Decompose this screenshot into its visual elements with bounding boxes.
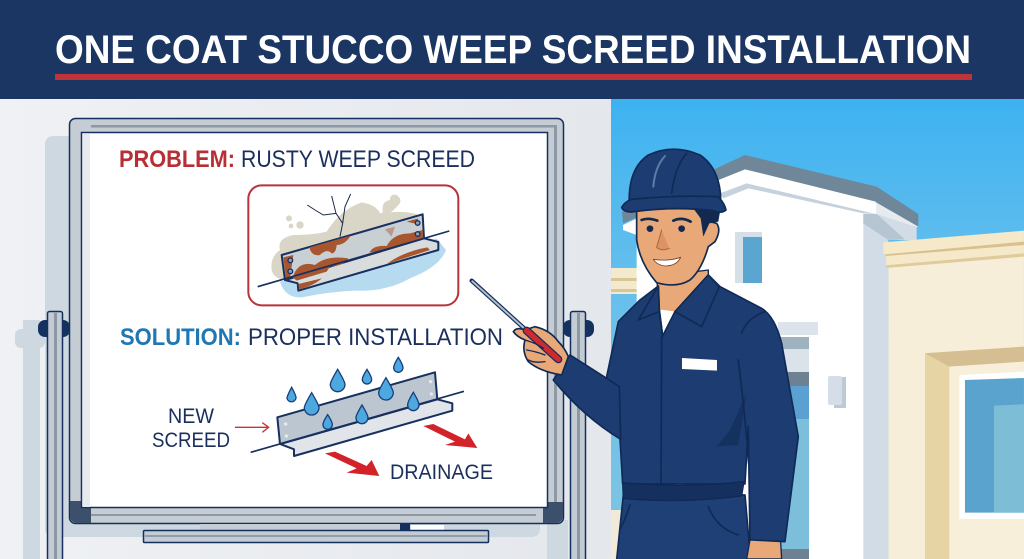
wall line xyxy=(258,231,449,287)
sky xyxy=(611,99,1024,559)
problem frame xyxy=(248,185,458,305)
right stand post front xyxy=(570,312,586,559)
eyes xyxy=(647,225,685,232)
label: drainage: DRAINAGE xyxy=(390,461,493,484)
background wall xyxy=(0,99,611,559)
heading: solution: SOLUTION: xyxy=(120,324,241,351)
label: new screed: SCREED xyxy=(152,429,230,452)
header band xyxy=(0,0,1024,99)
cream building xyxy=(883,231,1024,559)
screw holes xyxy=(284,380,433,438)
entry canopy and glazing xyxy=(778,322,818,559)
building backdrop xyxy=(611,155,1024,559)
whiteboard on stand xyxy=(15,118,594,559)
tray and marker xyxy=(144,524,488,542)
pants pocket xyxy=(621,505,738,535)
stucco stain xyxy=(271,195,425,280)
panel: new screed illustration xyxy=(235,357,477,476)
title underline xyxy=(55,74,972,80)
hat ridge xyxy=(653,156,665,187)
smile xyxy=(653,257,681,266)
pants xyxy=(617,495,751,559)
lower hand xyxy=(747,540,782,559)
right stand post xyxy=(563,320,594,337)
pointer stick xyxy=(472,281,527,331)
water drops xyxy=(287,357,419,429)
board frame xyxy=(70,118,564,524)
hair xyxy=(693,208,721,237)
hard hat xyxy=(622,149,726,212)
name badge xyxy=(682,358,717,371)
drainage arrow left xyxy=(325,452,379,476)
wall lamp xyxy=(828,376,846,408)
board cast shadow xyxy=(15,136,568,559)
pointer arrow to screed xyxy=(235,423,269,432)
board writing surface xyxy=(82,132,548,508)
worker figure xyxy=(472,149,798,559)
left stand post xyxy=(38,312,70,559)
new metal screed xyxy=(277,372,452,456)
nose xyxy=(657,230,669,250)
torso shading xyxy=(717,393,747,447)
hat brim xyxy=(622,196,726,212)
left jacket collar xyxy=(638,286,663,336)
drainage arrow right xyxy=(423,424,477,448)
pointer red grip xyxy=(527,331,558,359)
head xyxy=(637,207,719,285)
wall line xyxy=(251,391,464,452)
window xyxy=(959,372,1024,519)
pointing sleeve xyxy=(553,355,621,439)
belt xyxy=(623,482,744,501)
eyebrows xyxy=(642,219,691,222)
recessed window surround xyxy=(925,347,1024,559)
neck xyxy=(657,270,708,313)
pointer shaft highlight xyxy=(472,281,527,331)
label: new screed: NEW xyxy=(168,405,214,428)
water puddle xyxy=(280,238,446,297)
fingers xyxy=(525,340,545,362)
hand xyxy=(513,327,568,375)
panel: rusty screed illustration xyxy=(248,185,458,305)
shirt collar xyxy=(659,309,676,337)
white stucco building xyxy=(622,155,918,559)
heading: solution description: PROPER INSTALLATION xyxy=(248,324,503,351)
pointer red handle xyxy=(527,331,558,359)
rust patches xyxy=(283,218,430,289)
heading: problem: PROBLEM: xyxy=(119,146,235,173)
heading: problem description: RUSTY WEEP SCREED xyxy=(241,146,475,173)
jacket torso xyxy=(607,275,798,542)
right jacket collar xyxy=(675,275,719,327)
beige building behind worker xyxy=(611,268,641,559)
screws xyxy=(288,221,420,274)
crack xyxy=(307,194,351,237)
label: new screed xyxy=(152,405,230,452)
small upper window xyxy=(735,232,762,283)
zipper and sleeve seams xyxy=(661,312,765,485)
rusty metal screed xyxy=(282,214,438,291)
title: ONE COAT STUCCO WEEP SCREED INSTALLATION xyxy=(55,28,971,72)
hat seam xyxy=(672,153,687,193)
